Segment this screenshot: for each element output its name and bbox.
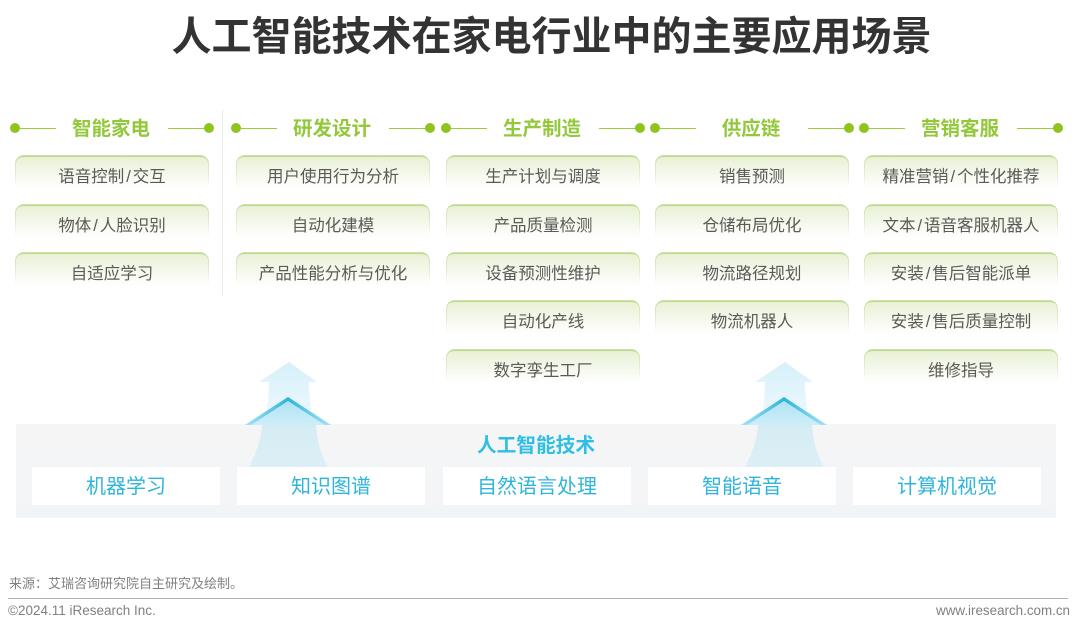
panel: R&D and design [231,118,435,283]
item: 自动化产线 [502,313,584,331]
item: 文本/语音客服机器人 [882,217,1040,235]
item: 物流机器人 [711,313,793,331]
heading: manufacturing [441,118,645,140]
heading: marketing and customer service [859,118,1063,140]
item [864,349,1058,386]
panel: marketing and customer service [859,118,1063,380]
item: 维修指导 [928,362,994,380]
technology: natural language processing: 自然语言处理 [477,476,597,498]
item: 安装/售后智能派单 [891,265,1031,283]
item [446,155,640,192]
panel: AI technologies [16,424,1056,518]
heading: marketing and customer service: 营销客服 [921,118,999,140]
item [864,204,1058,241]
heading: R&D and design [231,118,435,140]
heading: AI technologies: 人工智能技术 [477,435,595,457]
item: 产品质量检测 [494,217,592,235]
title: 人工智能技术在家电行业中的主要应用场景 [172,15,932,59]
item [655,155,849,192]
item [655,300,849,337]
technology: machine learning: 机器学习 [86,476,166,498]
source note: 来源：艾瑞咨询研究院自主研究及绘制。 [9,576,243,591]
item [446,252,640,289]
item: 物流路径规划 [702,265,802,283]
heading: supply chain: 供应链 [722,118,780,140]
item [864,252,1058,289]
item [446,300,640,337]
technology: knowledge graph [237,467,425,505]
item: 生产计划与调度 [485,168,601,186]
footer rule [8,598,1068,599]
item [655,252,849,289]
item: 数字孪生工厂 [494,362,592,380]
item: 物体/人脸识别 [58,217,166,235]
item: 自动化建模 [292,217,374,235]
technology: computer vision [853,467,1041,505]
heading: smart appliances [10,118,214,140]
item [236,252,430,289]
item [864,300,1058,337]
heading: manufacturing: 生产制造 [503,118,581,140]
item: 产品性能分析与优化 [259,265,407,283]
item: 用户使用行为分析 [267,168,399,186]
item [446,349,640,386]
technology: intelligent speech [648,467,836,505]
item: 安装/售后质量控制 [891,313,1031,331]
item: 设备预测性维护 [485,265,601,283]
heading: R&D and design: 研发设计 [293,118,371,140]
icon: right up arrow [741,362,827,467]
icon: left up arrow [245,362,331,467]
item [446,204,640,241]
item: 仓储布局优化 [702,217,802,235]
item: 销售预测 [719,168,785,186]
technology: natural language processing [443,467,631,505]
divider between first and second column [222,110,223,296]
item: 精准营销/个性化推荐 [882,168,1040,186]
panel: smart appliances [10,118,214,283]
panel: manufacturing [441,118,645,380]
item [236,204,430,241]
technology: intelligent speech: 智能语音 [702,476,782,498]
item [15,155,209,192]
item [15,252,209,289]
technology: knowledge graph: 知识图谱 [291,476,371,498]
item [236,155,430,192]
technology: machine learning [32,467,220,505]
item: 自适应学习 [71,265,153,283]
copyright: ©2024.11 iResearch Inc. [8,603,156,618]
item: 语音控制/交互 [58,168,166,186]
panel: supply chain [650,118,854,331]
item [655,204,849,241]
item [15,204,209,241]
website: www.iresearch.com.cn [936,603,1070,618]
heading: supply chain [650,118,854,140]
item [864,155,1058,192]
technology: computer vision: 计算机视觉 [897,476,997,498]
heading: smart appliances: 智能家电 [72,118,150,140]
